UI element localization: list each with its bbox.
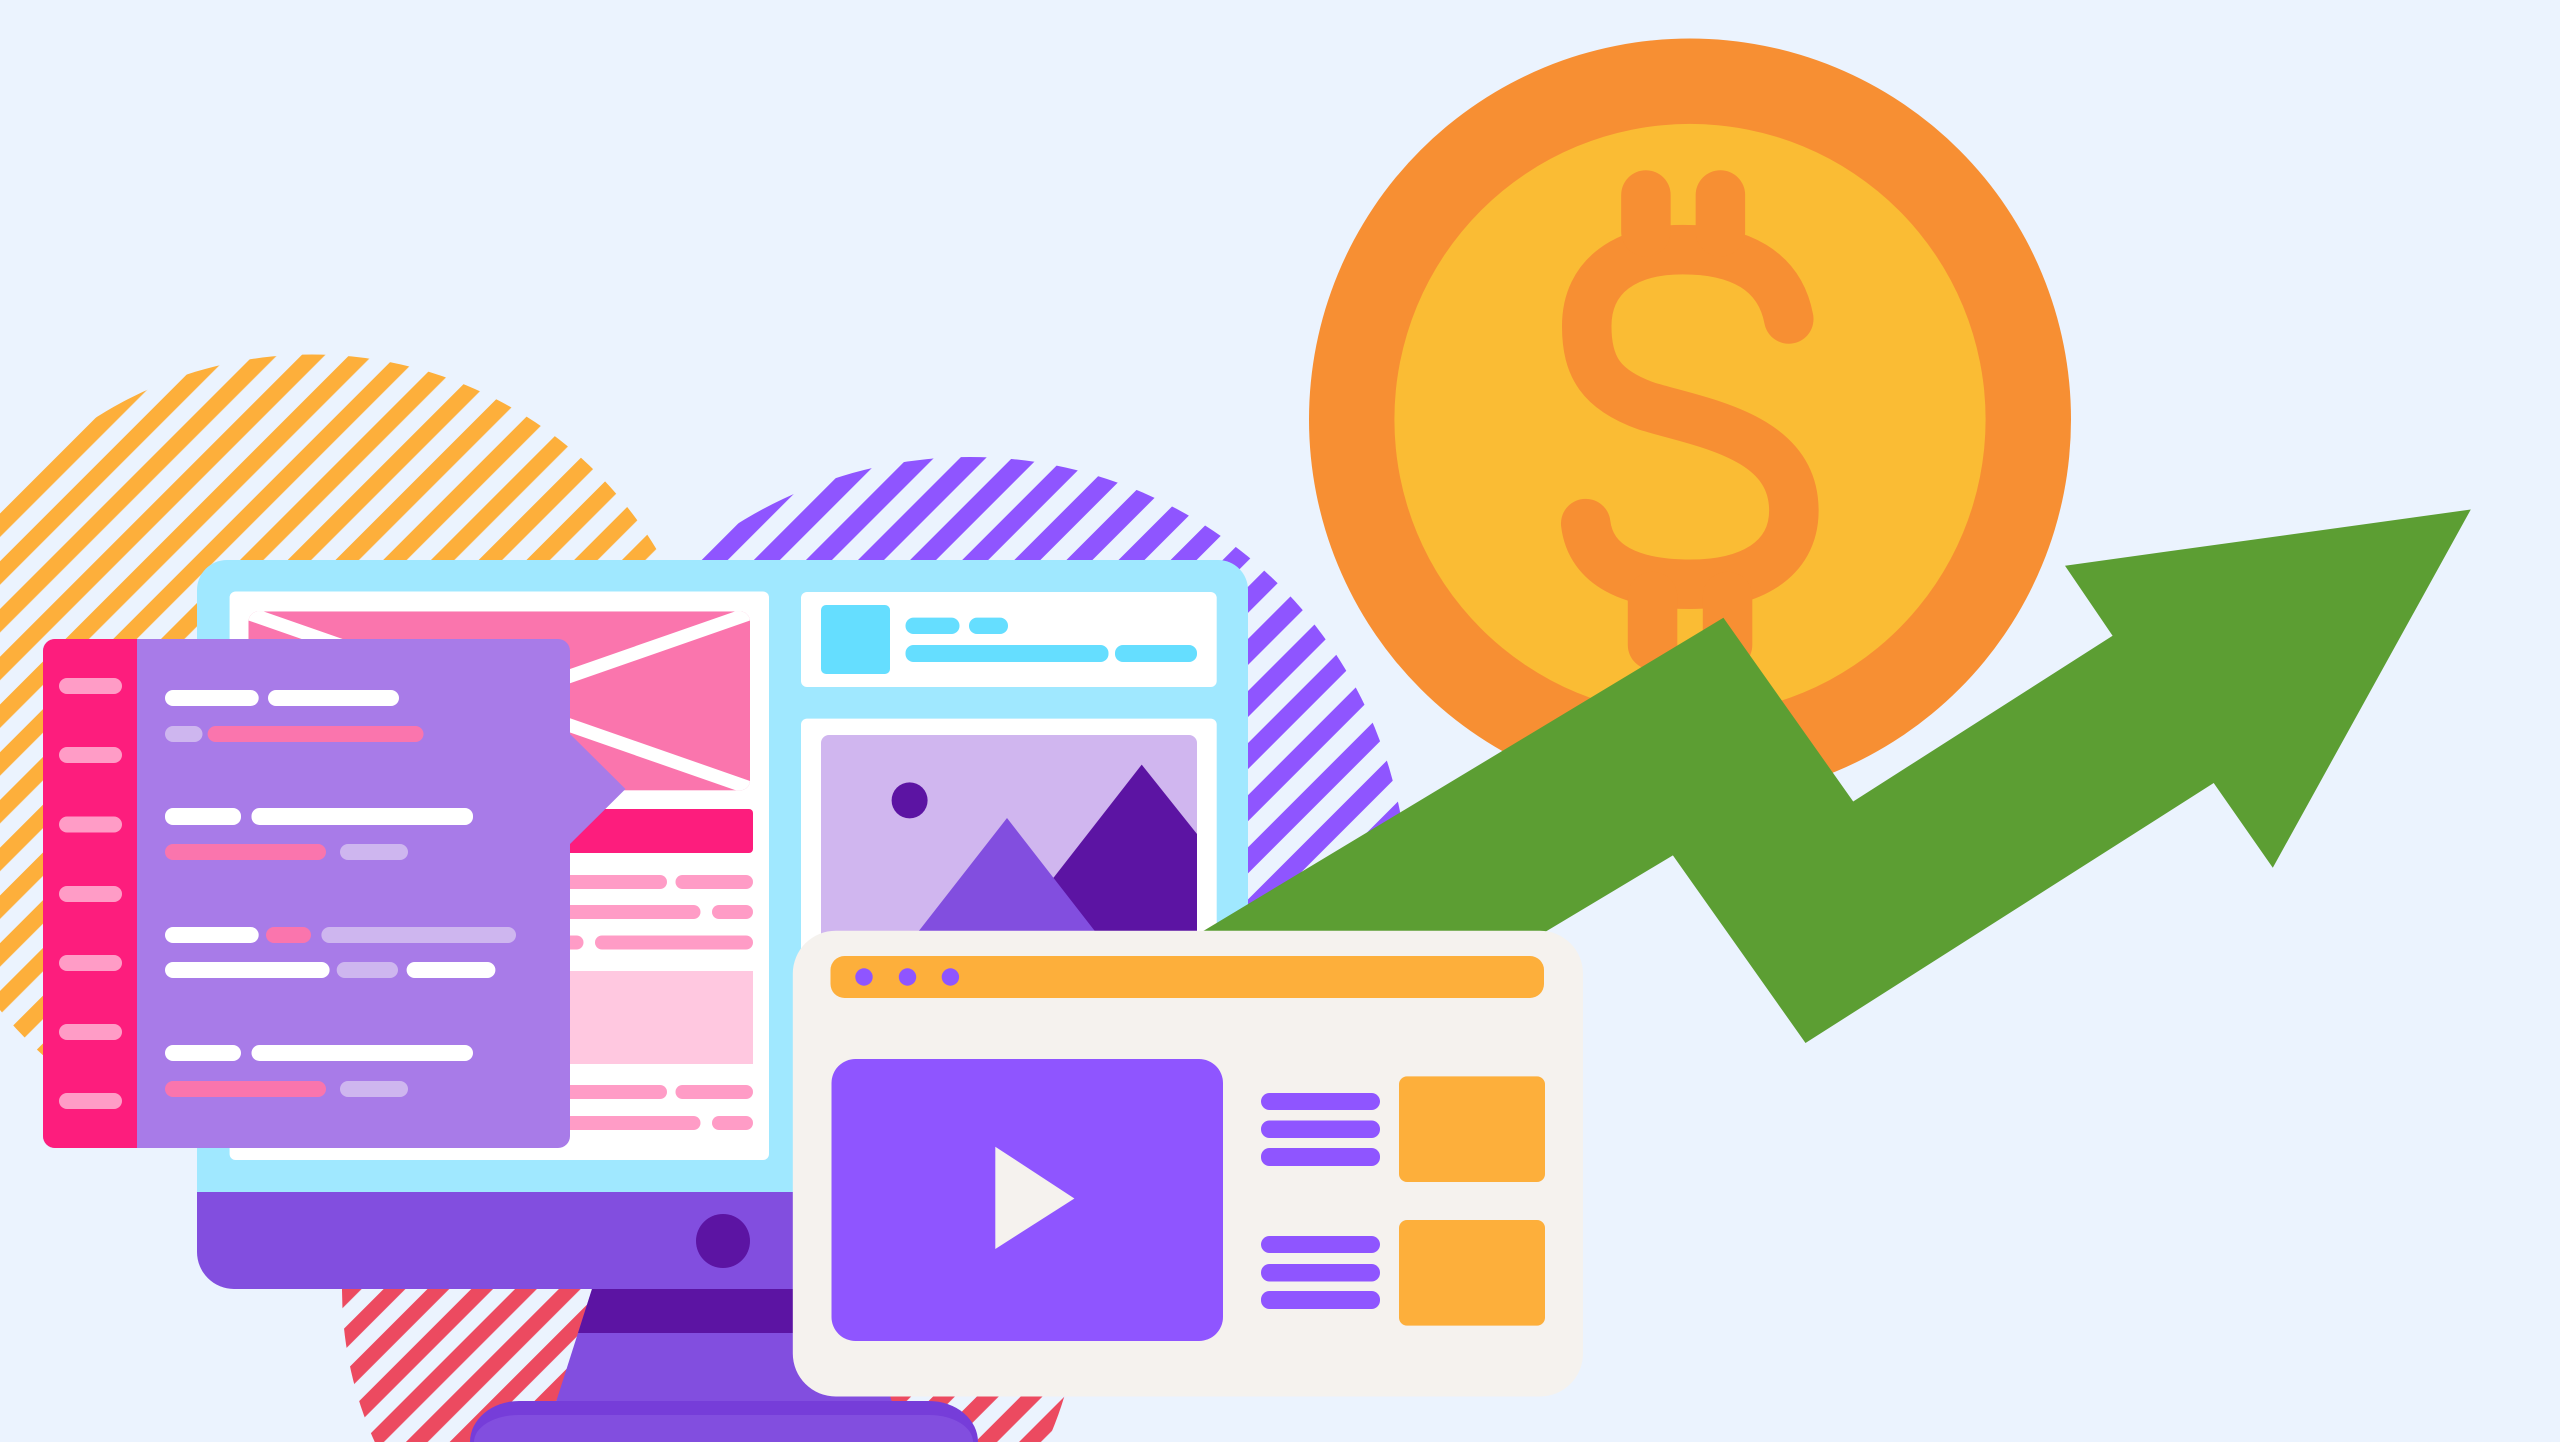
dollar sign (1586, 195, 1794, 645)
web page panel: top right card (801, 592, 1217, 687)
thumbnail: lower (1399, 1220, 1545, 1326)
code lines: white (165, 690, 495, 1061)
coin outer ring (1309, 38, 2071, 800)
play icon (995, 1147, 1074, 1249)
sun (892, 782, 928, 818)
card body (793, 931, 1583, 1396)
pale pink block (248, 971, 753, 1064)
page headline bar (248, 809, 753, 853)
thumbnail: upper (1399, 1076, 1545, 1182)
hero image placeholder (235, 608, 764, 793)
sidebar items (59, 678, 122, 1109)
text lines: lower (1261, 1236, 1380, 1309)
browser dots (855, 968, 959, 986)
code lines: pink (165, 726, 424, 1097)
coin inner face (1394, 124, 1986, 715)
browser address bar (830, 956, 1544, 998)
code lines: lilac (165, 726, 516, 1097)
landscape image (821, 735, 1197, 1000)
video player browser card (793, 931, 1583, 1396)
code editor window (43, 639, 626, 1148)
light mountain (896, 818, 1116, 960)
thumbnail square (821, 605, 890, 674)
striped circle: orange (0, 354, 656, 1056)
monitor base (470, 1401, 978, 1442)
dark mountain (960, 765, 1197, 1000)
text lines (906, 618, 1197, 662)
window sidebar (43, 639, 137, 1148)
monitor stand (556, 1289, 892, 1402)
monitor screen frame (197, 560, 1248, 1192)
striped circle: purple (702, 457, 1400, 904)
text lines (248, 875, 753, 950)
lower text lines (248, 1085, 753, 1130)
text lines: upper (1261, 1093, 1380, 1166)
striped circle: red (342, 1289, 1064, 1442)
power button (696, 1214, 750, 1268)
coin with dollar sign (1309, 38, 2071, 800)
growth arrow (1190, 510, 2471, 1043)
web page panel: image card (801, 719, 1217, 1160)
video frame (832, 1059, 1223, 1341)
window body with pointer (43, 639, 626, 1148)
monitor bezel (197, 1192, 1248, 1289)
desktop monitor (197, 560, 1248, 1442)
web page panel: left column (230, 592, 769, 1160)
